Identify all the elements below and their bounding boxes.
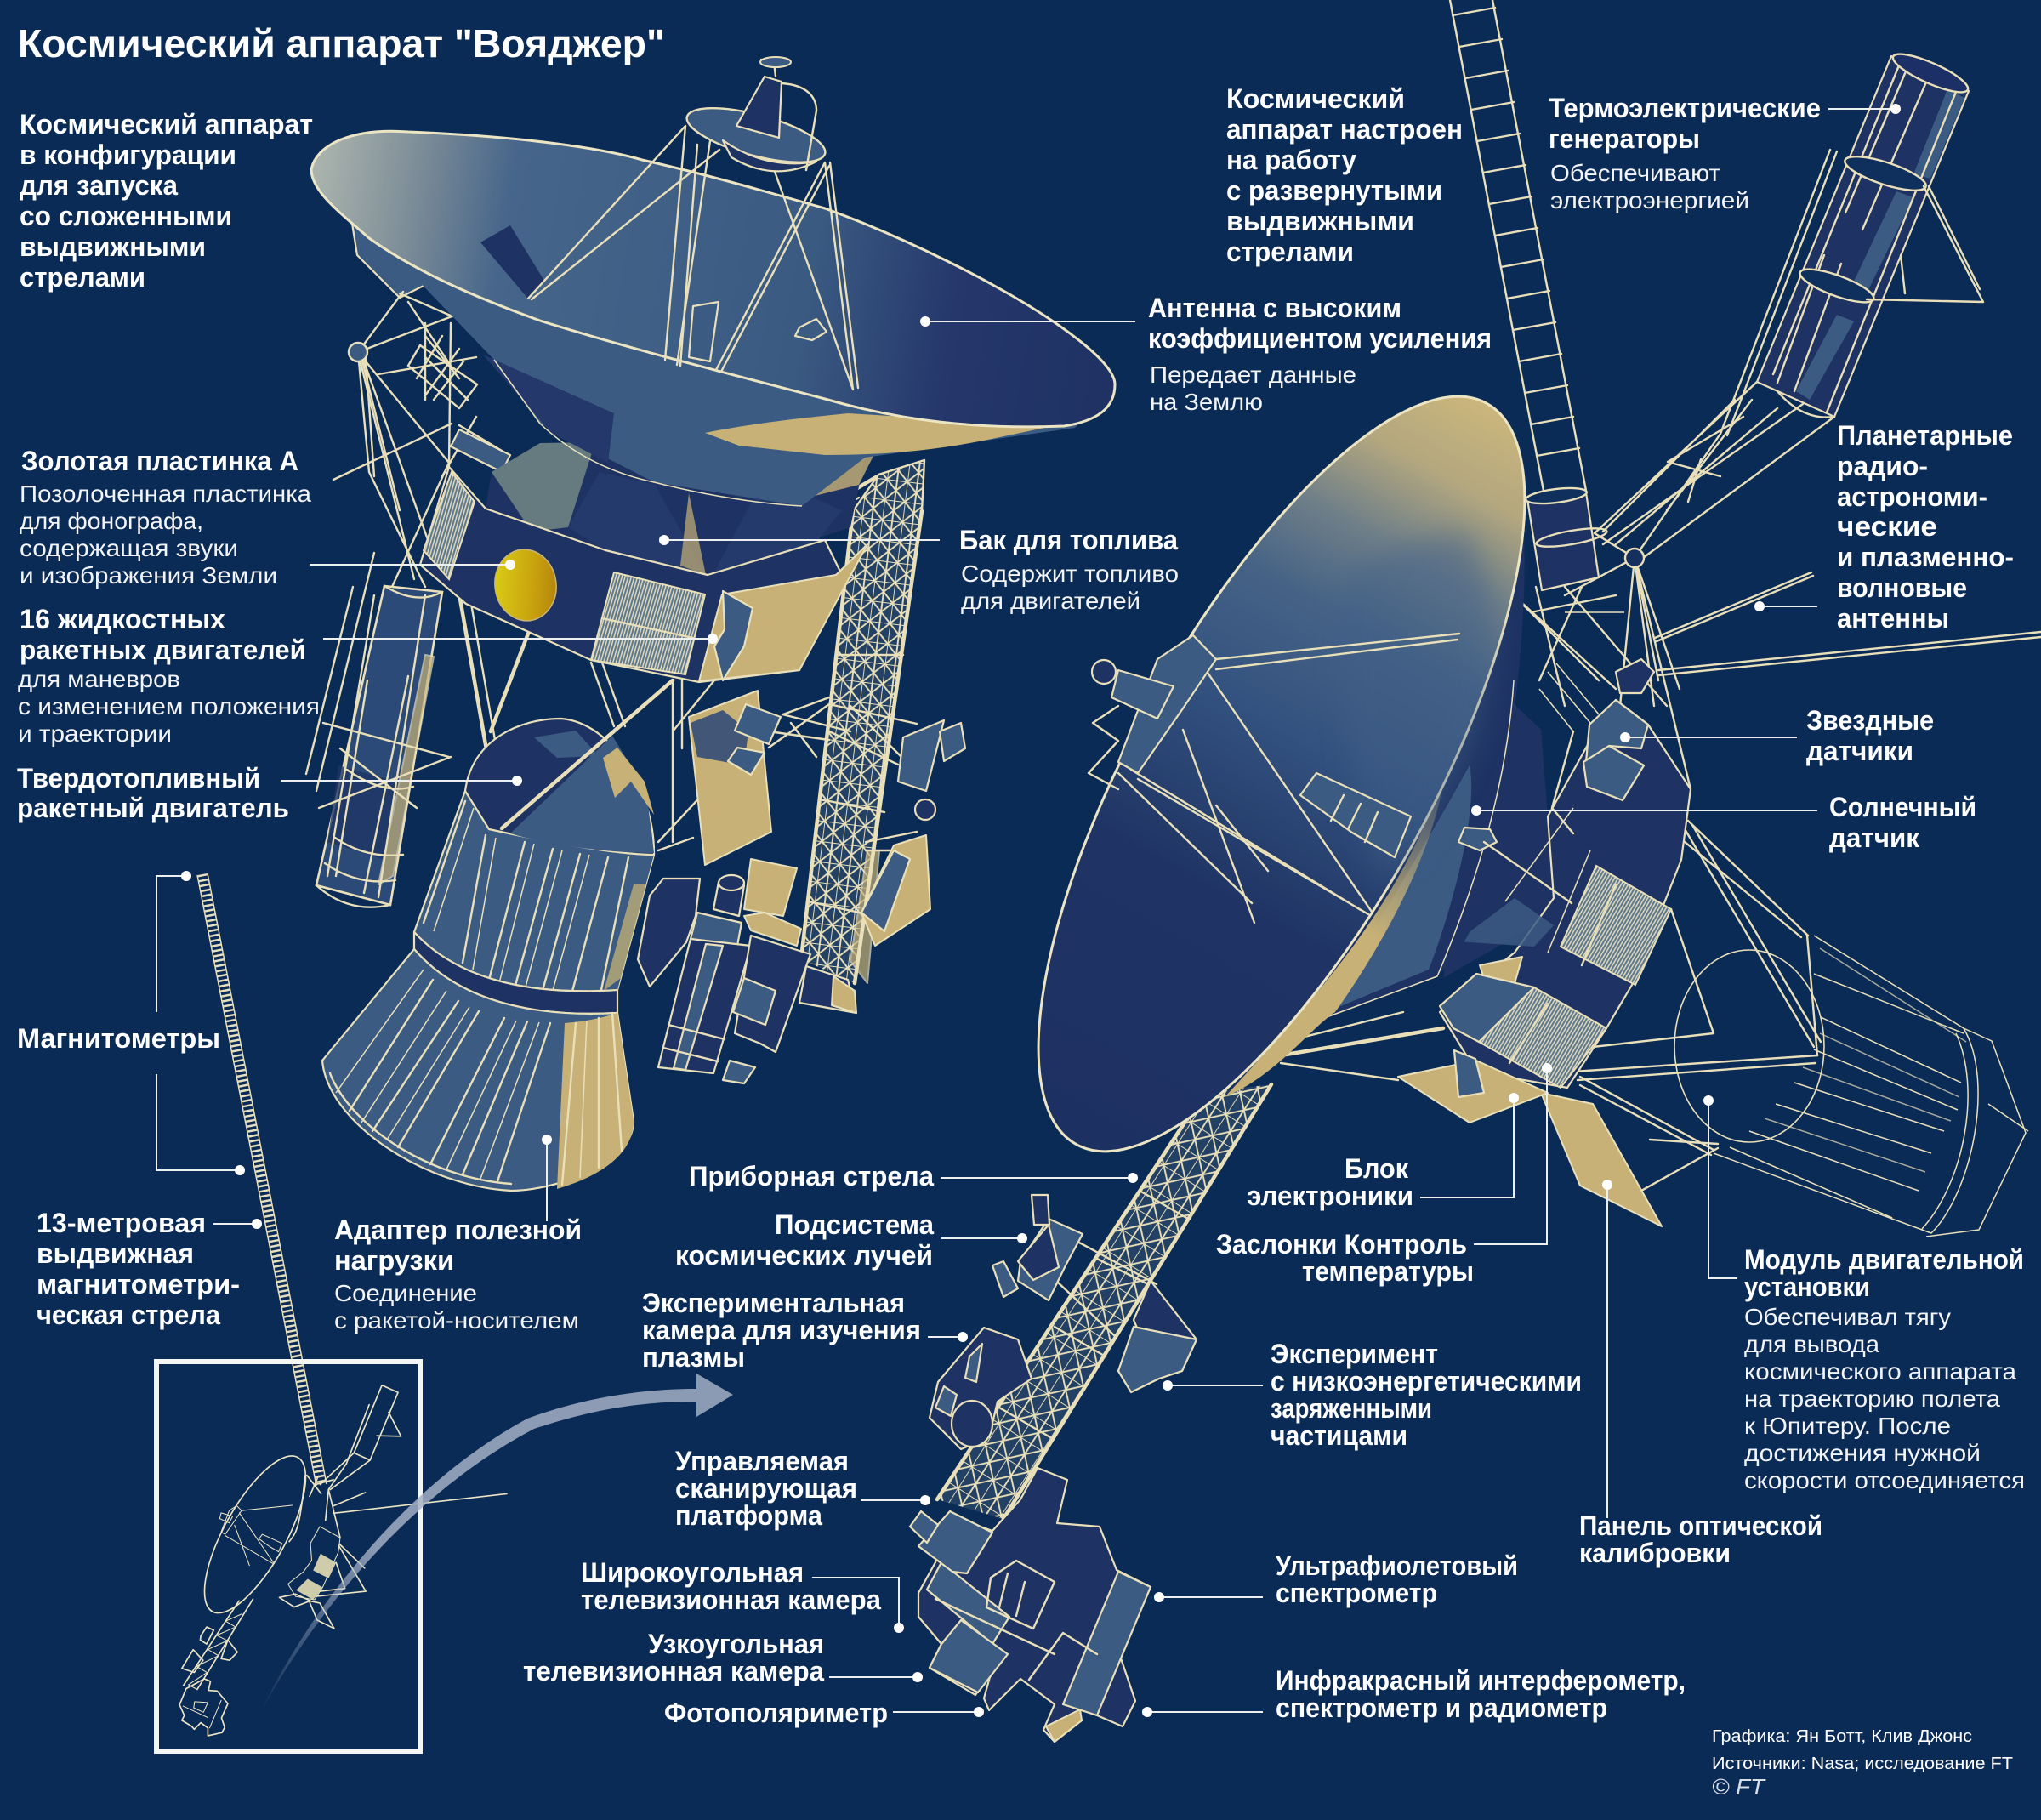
label: golden plate: содержащая звуки — [20, 535, 238, 561]
label: narrow angle camera: Узкоугольная — [648, 1629, 824, 1659]
label: solid rocket motor: Твердотопливный — [17, 763, 260, 793]
credits — [1712, 1727, 2013, 1800]
label: launch configuration: Космический аппарат — [20, 109, 313, 139]
arrow — [259, 1374, 733, 1715]
label: thrusters: ракетных двигателей — [20, 634, 306, 665]
star sensors — [1552, 700, 1648, 833]
label: fuel tank: Содержит топливо — [961, 560, 1179, 587]
label: magnetometers: Магнитометры — [17, 1023, 220, 1054]
label: launch configuration: стрелами — [20, 262, 145, 293]
rear struts — [1514, 549, 1821, 1191]
label: electronics: Блок — [1345, 1153, 1409, 1184]
nozzle skirt — [322, 949, 634, 1191]
label: solid rocket motor: ракетный двигатель — [17, 793, 289, 823]
electronics gold panel — [1281, 1012, 1548, 1123]
label: wide angle camera: телевизионная камера — [581, 1584, 881, 1615]
RTG stack — [306, 553, 451, 907]
label: plasma camera: плазмы — [642, 1342, 745, 1373]
label: launch configuration: со сложенными — [20, 201, 232, 231]
cosmic ray subsystem — [992, 1195, 1083, 1300]
label: optical calibration panel: Панель оптической — [1579, 1510, 1822, 1541]
scan platform — [910, 1468, 1151, 1742]
label: radio astronomy antennas: Планетарные — [1837, 420, 2013, 451]
label: golden plate — [20, 446, 311, 589]
label: propulsion module — [1744, 1244, 2025, 1493]
label: propulsion module: на траекторию полета — [1744, 1385, 2000, 1412]
thruster — [714, 591, 753, 680]
label: sun sensor: датчик — [1829, 822, 1920, 853]
label: high gain antenna: коэффициентом усиления — [1148, 323, 1492, 354]
RTG boom lattice — [1565, 382, 1834, 689]
title: Космический аппарат "Вояджер" — [18, 21, 665, 65]
label: ultraviolet spectrometer: спектрометр — [1276, 1578, 1437, 1608]
label: optical calibration panel: калибровки — [1579, 1538, 1731, 1568]
label: magnetometer boom: выдвижная — [37, 1238, 194, 1269]
label: thrusters: 16 жидкостных — [20, 604, 225, 634]
label: photopolarimeter: Фотополяриметр — [664, 1698, 888, 1728]
label: propulsion module: скорости отсоединяется — [1744, 1467, 2025, 1493]
label: thermal shutters: температуры — [1302, 1256, 1474, 1287]
label: wide angle camera: Широкоугольная — [581, 1557, 804, 1588]
label: payload adapter: Соединение — [334, 1280, 477, 1306]
label: thermal shutters — [1216, 1229, 1474, 1287]
label: low energy particle experiment: с низкоэнергетическими — [1271, 1366, 1582, 1396]
credits: Графика: Ян Ботт, Клив Джонс — [1712, 1727, 1972, 1746]
subreflector and cone — [528, 57, 858, 390]
louvers — [424, 472, 705, 674]
bus — [1440, 680, 1691, 1088]
label: launch configuration: выдвижными — [20, 231, 206, 262]
propulsion module — [1674, 936, 2028, 1237]
label: scan platform: сканирующая — [675, 1473, 857, 1504]
label: thrusters — [18, 604, 320, 747]
label: radio astronomy antennas: астрономи- — [1837, 481, 1987, 512]
bus band — [420, 467, 867, 682]
label: low energy particle experiment — [1271, 1339, 1582, 1451]
label: radio astronomy antennas: волновые — [1837, 572, 1967, 603]
high gain dish front — [947, 332, 1617, 1216]
label: cosmic ray subsystem: Подсистема — [775, 1209, 934, 1240]
side pod — [861, 835, 930, 946]
label: propulsion module: Обеспечивал тягу — [1744, 1304, 1951, 1330]
label: propulsion module: для вывода — [1744, 1331, 1879, 1357]
label: radio astronomy antennas: радио- — [1837, 451, 1928, 481]
label: magnetometer boom — [37, 1208, 240, 1330]
label: scan platform: платформа — [675, 1500, 822, 1531]
label: scan platform — [675, 1446, 857, 1531]
label: deployed configuration: стрелами — [1226, 236, 1354, 267]
label: optical calibration panel — [1579, 1510, 1822, 1568]
label: magnetometer boom: магнитометри- — [37, 1269, 240, 1300]
high gain dish back — [311, 169, 1115, 506]
instrument boom — [937, 1084, 1271, 1519]
label: propulsion module: достижения нужной — [1744, 1440, 1981, 1466]
label: thrusters: с изменением положения — [18, 693, 320, 719]
label: plasma camera: Экспериментальная — [642, 1288, 905, 1318]
optical calibration panel — [1541, 1093, 1662, 1226]
label: instrument boom: Приборная стрела — [689, 1161, 934, 1192]
label: launch configuration: в конфигурации — [20, 139, 236, 170]
instrument cluster — [638, 859, 856, 1083]
label: thrusters: и траектории — [18, 720, 172, 747]
label: plasma camera: камера для изучения — [642, 1315, 921, 1345]
label: solid rocket motor — [17, 763, 289, 823]
thermoelectric generators — [1720, 48, 1983, 435]
label: propulsion module: космического аппарата — [1744, 1358, 2016, 1385]
plasma camera — [930, 1328, 1032, 1449]
label: deployed configuration: Космический — [1226, 83, 1405, 114]
label: deployed configuration: выдвижными — [1226, 206, 1414, 236]
golden plate A — [491, 545, 560, 625]
label: golden plate: и изображения Земли — [20, 562, 277, 589]
label: thermal shutters: Заслонки Контроль — [1216, 1229, 1467, 1260]
label: launch configuration: для запуска — [20, 170, 178, 201]
label: low energy particle experiment: заряженными — [1271, 1393, 1432, 1424]
label: high gain antenna — [1148, 293, 1492, 415]
label: thermoelectric generators: электроэнергией — [1550, 187, 1749, 213]
label: propulsion module: установки — [1744, 1271, 1870, 1302]
label: infrared interferometer — [1276, 1665, 1686, 1723]
label: star sensors: Звездные — [1806, 705, 1934, 736]
label: golden plate: Золотая пластинка А — [21, 446, 298, 476]
label: thermoelectric generators: генераторы — [1549, 123, 1700, 154]
label: payload adapter: Адаптер полезной — [334, 1214, 582, 1245]
label: magnetometer boom: 13-метровая — [37, 1208, 206, 1238]
label: sun sensor: Солнечный — [1829, 792, 1976, 822]
credits: Источники: Nasa; исследование FT — [1712, 1755, 2013, 1773]
label: deployed configuration — [1226, 83, 1463, 267]
label: thermoelectric generators: Обеспечивают — [1550, 160, 1720, 186]
spacecraft: launch configuration — [306, 57, 1115, 1191]
label: cosmic ray subsystem — [675, 1209, 934, 1271]
label: cosmic ray subsystem: космических лучей — [675, 1240, 933, 1271]
instrument arms — [769, 697, 917, 850]
motor dome — [465, 680, 673, 855]
label: payload adapter — [334, 1214, 582, 1334]
upper struts and hub — [333, 213, 510, 587]
label: propulsion module: к Юпитеру. После — [1744, 1413, 1951, 1439]
label: scan platform: Управляемая — [675, 1446, 849, 1476]
fuel tank area — [486, 442, 876, 575]
label: fuel tank — [959, 525, 1179, 614]
label: narrow angle camera — [523, 1629, 824, 1686]
inset frame — [156, 1362, 420, 1751]
label: thermoelectric generators: Термоэлектрические — [1549, 93, 1821, 123]
label: fuel tank: для двигателей — [961, 588, 1140, 614]
legs to solid rocket motor — [460, 599, 714, 850]
label: golden plate: Позолоченная пластинка — [20, 481, 311, 507]
label: electronics: электроники — [1247, 1180, 1413, 1211]
magnetometer boom (stowed) — [197, 873, 327, 1486]
credits: © FT — [1712, 1774, 1766, 1800]
label: wide angle camera — [581, 1557, 881, 1615]
label: payload adapter: с ракетой-носителем — [334, 1307, 579, 1334]
label: infrared interferometer: Инфракрасный интерферометр, — [1276, 1665, 1686, 1696]
label: deployed configuration: аппарат настроен — [1226, 114, 1463, 145]
optical panel — [689, 691, 771, 865]
label: radio astronomy antennas: ческие — [1837, 511, 1937, 542]
label: magnetometer boom: ческая стрела — [37, 1300, 220, 1330]
leader lines and dots — [156, 104, 1901, 1717]
low energy particle experiment — [1118, 1281, 1197, 1392]
label: ultraviolet spectrometer — [1276, 1550, 1518, 1608]
label: radio astronomy antennas: антенны — [1837, 603, 1949, 634]
solid rocket motor cylinder — [414, 791, 654, 998]
plasma wave antennas — [1655, 572, 2041, 675]
label: sun sensor — [1829, 792, 1976, 853]
label: low energy particle experiment: частицами — [1271, 1420, 1407, 1451]
label: thermoelectric generators — [1549, 93, 1821, 213]
arm instrument boxes — [728, 704, 965, 820]
label: deployed configuration: с развернутыми — [1226, 175, 1442, 206]
label: deployed configuration: на работу — [1226, 145, 1356, 175]
dish feed and struts — [1089, 532, 1572, 923]
magnetometer boom ladder — [1450, 0, 1608, 590]
dish surface details — [480, 225, 827, 361]
dish bowl back — [1225, 492, 1525, 1097]
instrument tower — [603, 460, 924, 983]
label: ultraviolet spectrometer: Ультрафиолетовый — [1276, 1550, 1518, 1581]
label: high gain antenna: на Землю — [1150, 389, 1263, 415]
label: propulsion module: Модуль двигательной — [1744, 1244, 2024, 1275]
label: electronics — [1247, 1153, 1413, 1211]
label: launch configuration — [20, 109, 313, 293]
label: star sensors — [1806, 705, 1934, 766]
label: narrow angle camera: телевизионная камера — [523, 1656, 824, 1686]
louvers — [1440, 866, 1671, 1088]
label: infrared interferometer: спектрометр и радиометр — [1276, 1692, 1607, 1723]
label: high gain antenna: Антенна с высоким — [1148, 293, 1401, 323]
label: radio astronomy antennas: и плазменно- — [1837, 542, 2014, 572]
motor ring — [414, 932, 617, 1014]
spacecraft: deployed configuration — [910, 0, 2041, 1742]
label: star sensors: датчики — [1806, 736, 1913, 766]
high gain dish front — [311, 131, 1115, 427]
label: thrusters: для маневров — [18, 666, 180, 692]
label: high gain antenna: Передает данные — [1150, 361, 1356, 388]
label: plasma camera — [642, 1288, 921, 1373]
label: fuel tank: Бак для топлива — [959, 525, 1178, 555]
label: low energy particle experiment: Эксперимент — [1271, 1339, 1438, 1369]
label: radio astronomy antennas — [1837, 420, 2014, 634]
label: payload adapter: нагрузки — [334, 1245, 454, 1276]
label: golden plate: для фонографа, — [20, 508, 203, 534]
inset spacecraft miniature — [179, 1385, 507, 1736]
